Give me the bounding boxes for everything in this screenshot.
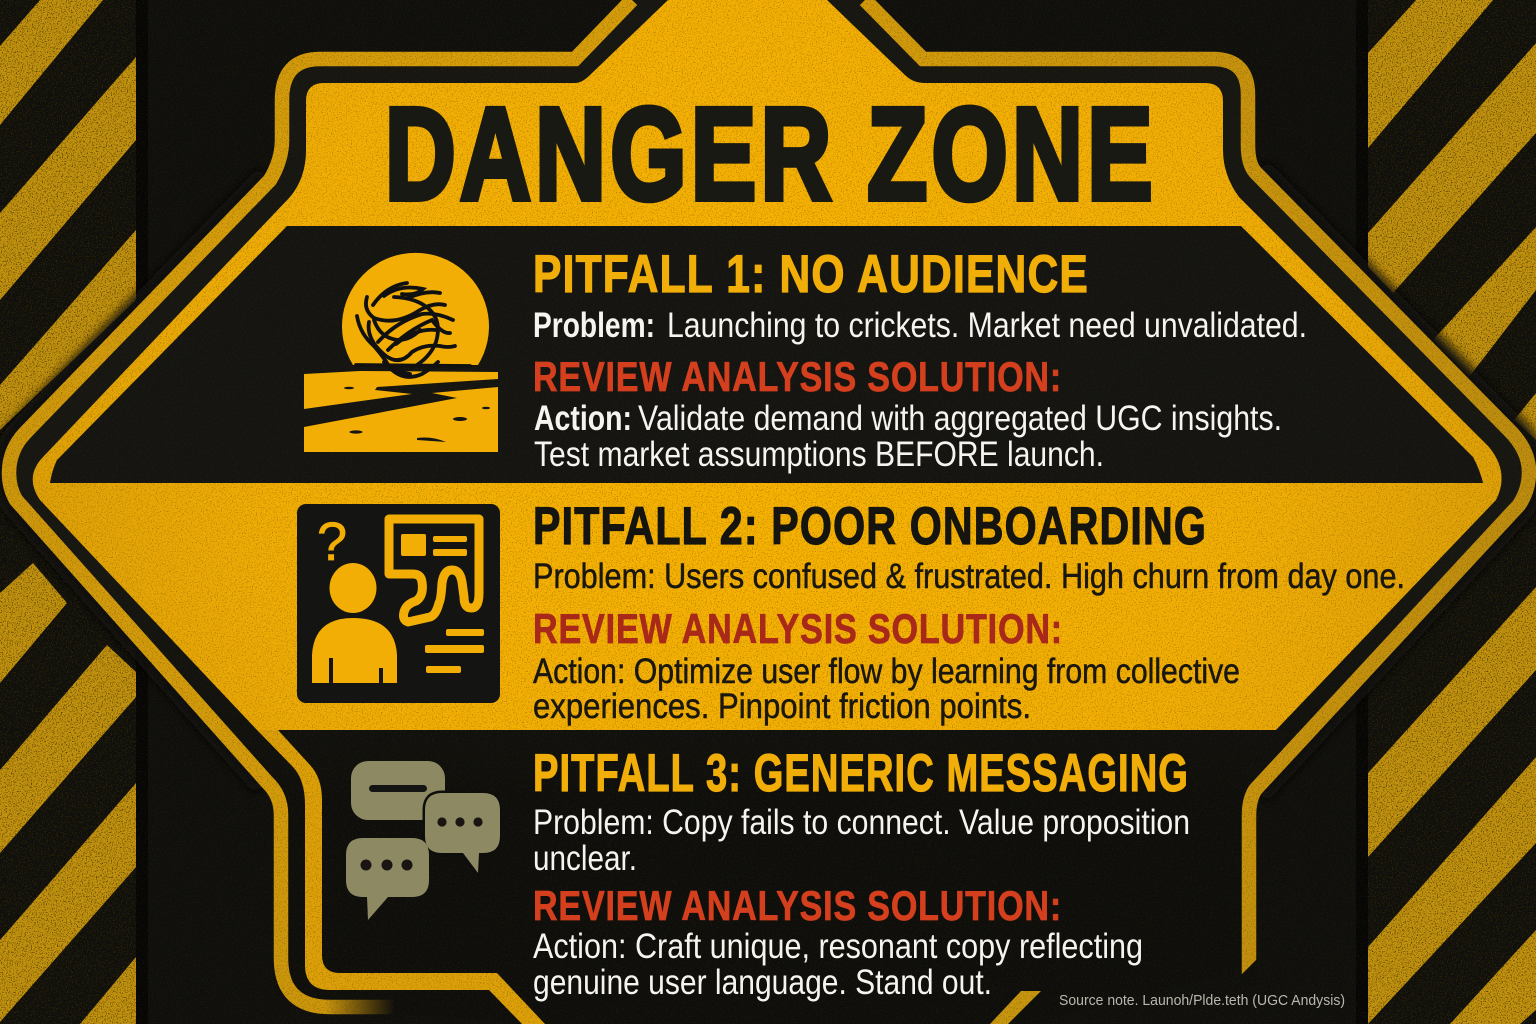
inner yellow border around pitfall 3 — [257, 730, 545, 1024]
action text: pitfall 1: Action: — [534, 399, 632, 438]
inner yellow border fragment, bottom right — [990, 991, 1041, 1024]
source note: Source note. Launoh/Plde.teth (UGC Andysis) — [1059, 993, 1345, 1009]
problem text: pitfall 3: unclear. — [533, 839, 637, 878]
sign drop shadow — [9, 173, 1529, 790]
dark vertical seam: right — [1356, 0, 1368, 1024]
icon: confused user and tangled flow — [297, 504, 500, 703]
heading: pitfall 2: PITFALL 2: POOR ONBOARDING — [533, 497, 1207, 556]
solution heading: pitfall 1: REVIEW ANALYSIS SOLUTION: — [533, 353, 1062, 400]
extra wear on left stripes — [0, 0, 136, 1024]
panel: pitfall 2 — [297, 497, 1405, 726]
action text: pitfall 3: Action: Craft unique, resonant copy reflecting — [533, 927, 1143, 966]
extra wear on right stripes — [1368, 0, 1536, 1024]
heading: pitfall 1: PITFALL 1: NO AUDIENCE — [533, 245, 1089, 304]
hazard stripes: left column — [0, 0, 136, 1024]
worn fade of the border at the bottom — [325, 996, 405, 1018]
solution heading: pitfall 3: REVIEW ANALYSIS SOLUTION: — [533, 882, 1062, 929]
action text: pitfall 2: Action: Optimize user flow by learning from collective — [533, 652, 1240, 691]
hazard stripes: right column — [1368, 0, 1536, 1024]
action text: pitfall 3 — [533, 927, 1143, 1002]
icon: confused user and tangled flow: ? — [317, 512, 347, 572]
problem text: pitfall 2: Problem: Users confused & frustrated. High churn from day one. — [533, 557, 1405, 596]
problem text: pitfall 1: Launching to crickets. Market need unvalidated. — [667, 306, 1307, 345]
solution heading: pitfall 2: REVIEW ANALYSIS SOLUTION: — [533, 605, 1063, 652]
panel: pitfall 3 — [346, 744, 1190, 1002]
icon: tumbleweed on desert — [304, 253, 498, 452]
action text: pitfall 2 — [533, 652, 1240, 726]
action text: pitfall 3: genuine user language. Stand out. — [533, 963, 992, 1002]
panel: pitfall 1 — [304, 245, 1307, 474]
action text: pitfall 1: Validate demand with aggregated UGC insights. — [638, 399, 1282, 438]
problem text: pitfall 3: Problem: Copy fails to connect. Value proposition — [533, 803, 1190, 842]
panel: pitfall 1 background — [50, 226, 1483, 483]
dark vertical seam: left — [136, 0, 148, 1024]
yellow sign body — [33, 0, 1502, 730]
problem text: pitfall 3 — [533, 803, 1190, 878]
icon: speech bubbles — [346, 761, 500, 920]
action text: pitfall 2: experiences. Pinpoint friction points. — [533, 687, 1031, 726]
action text: pitfall 1: Test market assumptions BEFORE launch. — [534, 435, 1104, 474]
action text: pitfall 1 — [534, 399, 1282, 474]
heading: pitfall 3: PITFALL 3: GENERIC MESSAGING — [533, 744, 1189, 803]
title: DANGER ZONE — [385, 80, 1157, 227]
problem text: pitfall 1: Problem: — [533, 306, 655, 345]
